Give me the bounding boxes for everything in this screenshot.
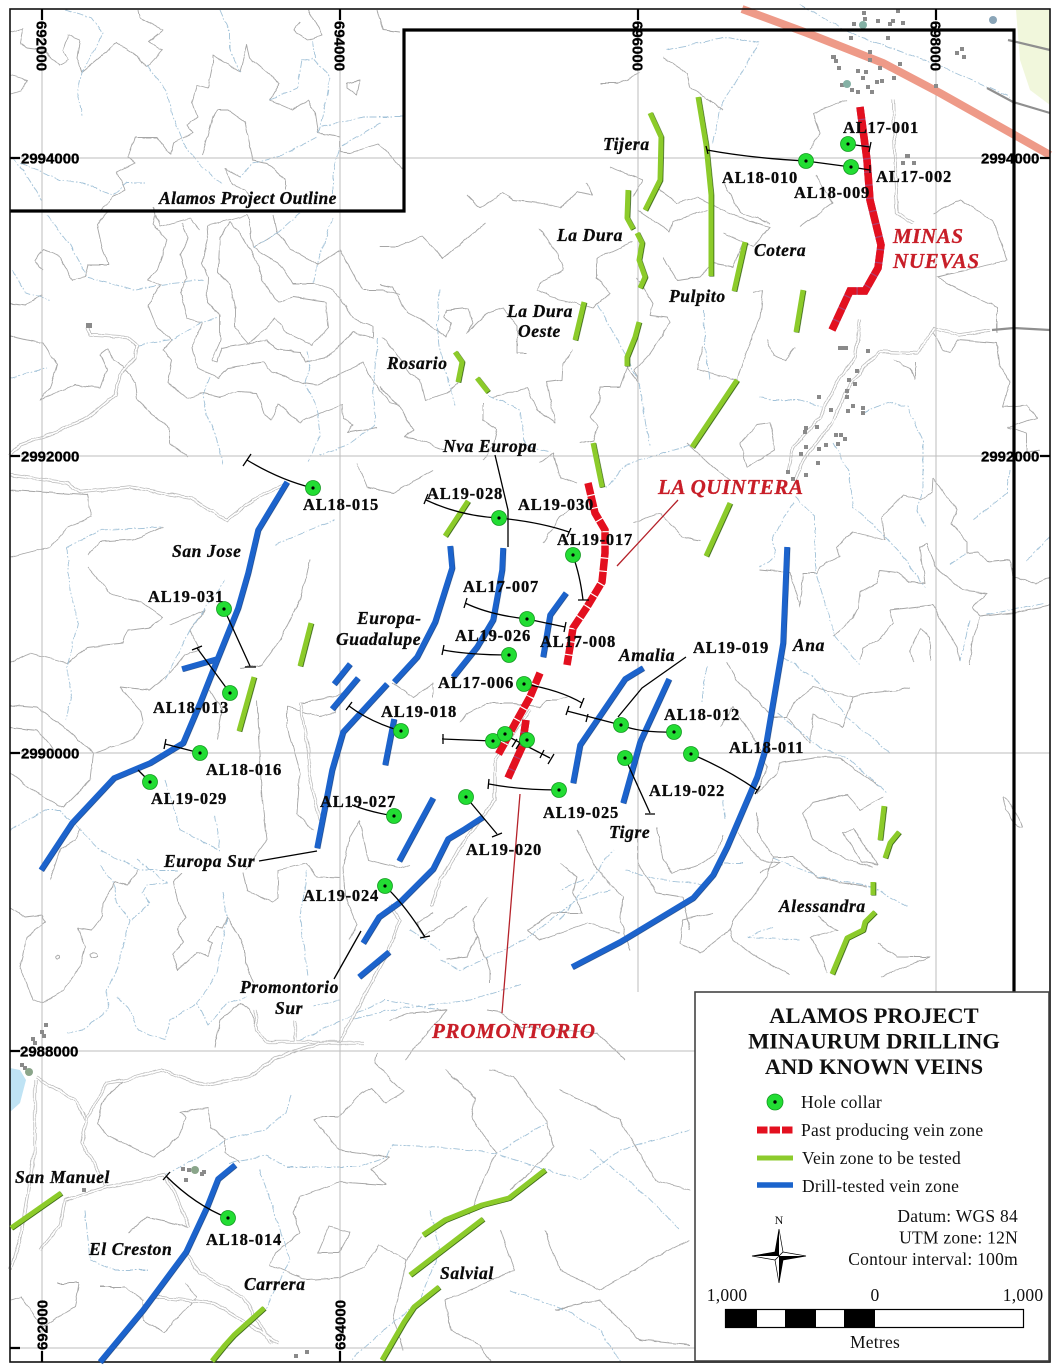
- grid coordinate labels: 694000: [332, 1300, 350, 1350]
- legend: past producing vein zone: Past producing vein zone: [801, 1120, 983, 1140]
- drill hole labels: AL19-018: [381, 702, 457, 721]
- project outline boundary: [10, 30, 1014, 992]
- vein name labels: Guadalupe: [336, 629, 421, 649]
- grid coordinate labels: 2994000: [981, 150, 1039, 168]
- drill hole labels: AL19-028: [427, 484, 503, 503]
- target area labels: PROMONTORIO: [431, 1019, 595, 1043]
- vein name labels: Alessandra: [778, 896, 866, 916]
- scale bar: 1,000: [1003, 1285, 1043, 1305]
- legend title: ALAMOS PROJECT: [769, 1003, 979, 1028]
- drill hole labels: AL19-027: [320, 792, 396, 811]
- drill hole labels: AL19-025: [543, 803, 619, 822]
- grid coordinate labels: 698000: [926, 21, 944, 71]
- drill hole labels: AL19-022: [649, 781, 725, 800]
- scale bar: 0: [870, 1285, 880, 1305]
- scale bar: 1,000: [707, 1285, 747, 1305]
- map datum notes: Datum: WGS 84: [897, 1206, 1018, 1226]
- map datum notes: UTM zone: 12N: [899, 1228, 1018, 1248]
- map datum notes: Contour interval: 100m: [848, 1249, 1018, 1269]
- vein name labels: Amalia: [618, 645, 675, 665]
- drill hole labels: AL19-019: [693, 638, 769, 657]
- north arrow: [752, 1213, 806, 1283]
- vein name labels: [15, 134, 866, 1294]
- drill hole labels: AL18-009: [794, 183, 870, 202]
- drill hole labels: AL19-017: [557, 530, 633, 549]
- drill hole labels: AL17-002: [876, 167, 952, 186]
- vein name labels: El Creston: [88, 1239, 172, 1259]
- vein name labels: La Dura: [556, 225, 623, 245]
- vein name labels: Rosario: [386, 353, 448, 373]
- red leaders: [502, 500, 678, 1013]
- grid coordinate labels: 2992000: [21, 448, 79, 466]
- vein name labels: Pulpito: [668, 286, 726, 306]
- grid coordinate labels: 2994000: [21, 150, 79, 168]
- legend: hole collar: Hole collar: [801, 1092, 882, 1112]
- vein name labels: Sur: [275, 998, 303, 1018]
- drill hole labels: AL18-015: [303, 495, 379, 514]
- drill hole labels: AL19-029: [151, 789, 227, 808]
- target area labels: MINAS: [892, 224, 963, 248]
- target area labels: NUEVAS: [892, 249, 979, 273]
- grid coordinate labels: 2990000: [21, 746, 79, 762]
- drill hole labels: [148, 118, 952, 1249]
- grid coordinate labels: 2992000: [981, 448, 1039, 466]
- drill hole labels: AL19-031: [148, 587, 224, 606]
- legend: vein zone to be tested: Vein zone to be tested: [802, 1148, 961, 1168]
- vein name labels: Nva Europa: [442, 436, 537, 456]
- legend panel: [695, 992, 1049, 1361]
- drill hole labels: AL18-011: [729, 738, 804, 757]
- grid coordinate labels: 696000: [628, 21, 646, 71]
- legend: drill-tested vein zone: Drill-tested vein zone: [802, 1176, 959, 1196]
- drill hole labels: AL17-008: [540, 632, 616, 651]
- drill hole collars: [142, 136, 858, 1226]
- vein name labels: San Manuel: [15, 1167, 110, 1187]
- north arrow: N: [775, 1213, 784, 1227]
- drill hole labels: AL17-001: [843, 118, 919, 137]
- drill hole labels: AL18-013: [153, 698, 229, 717]
- vein name labels: Europa-: [356, 608, 422, 628]
- vein name labels: Cotera: [754, 240, 806, 260]
- grid coordinate labels: 2988000: [20, 1044, 78, 1060]
- grid coordinate labels: 692000: [34, 1300, 52, 1350]
- vein name labels: Alamos Project Outline: [158, 188, 337, 208]
- vein name labels: Tigre: [609, 822, 650, 842]
- drill hole labels: AL17-006: [438, 673, 514, 692]
- grid coordinate labels: 694000: [330, 21, 348, 71]
- drill hole labels: AL18-014: [206, 1230, 282, 1249]
- vein zones to be tested: [11, 97, 899, 1361]
- drill hole labels: AL18-010: [722, 168, 798, 187]
- vein name labels: La Dura: [506, 301, 573, 321]
- scale bar: Metres: [850, 1332, 900, 1352]
- roads: grey paved: [987, 40, 1050, 330]
- drill hole labels: AL19-024: [303, 886, 379, 905]
- drill hole labels: AL19-020: [466, 840, 542, 859]
- vein name labels: Oeste: [518, 321, 561, 341]
- scale bar: [707, 1285, 1043, 1352]
- drill hole labels: AL17-007: [463, 577, 539, 596]
- past producing vein zones: [498, 107, 881, 778]
- road: highway: [742, 9, 1050, 155]
- target area labels: LA QUINTERA: [657, 475, 803, 499]
- target area labels: [431, 224, 979, 1043]
- vein name labels: Ana: [792, 635, 825, 655]
- vein name labels: San Jose: [172, 541, 241, 561]
- grid coordinate labels: 692000: [32, 21, 50, 71]
- legend title: AND KNOWN VEINS: [765, 1054, 983, 1079]
- drill-tested vein zones: [41, 482, 787, 1362]
- vein name labels: Salvial: [440, 1263, 494, 1283]
- vein name labels: Promontorio: [239, 977, 339, 997]
- vein name labels: Carrera: [244, 1274, 306, 1294]
- drill hole labels: AL19-030: [518, 495, 594, 514]
- drill hole labels: AL18-012: [664, 705, 740, 724]
- legend title: MINAURUM DRILLING: [748, 1028, 1000, 1054]
- drill traces and leaders: [138, 142, 871, 1218]
- drill hole labels: AL19-026: [455, 626, 531, 645]
- vein name labels: Europa Sur: [163, 851, 255, 871]
- vein name labels: Tijera: [603, 134, 650, 154]
- drill hole labels: AL18-016: [206, 760, 282, 779]
